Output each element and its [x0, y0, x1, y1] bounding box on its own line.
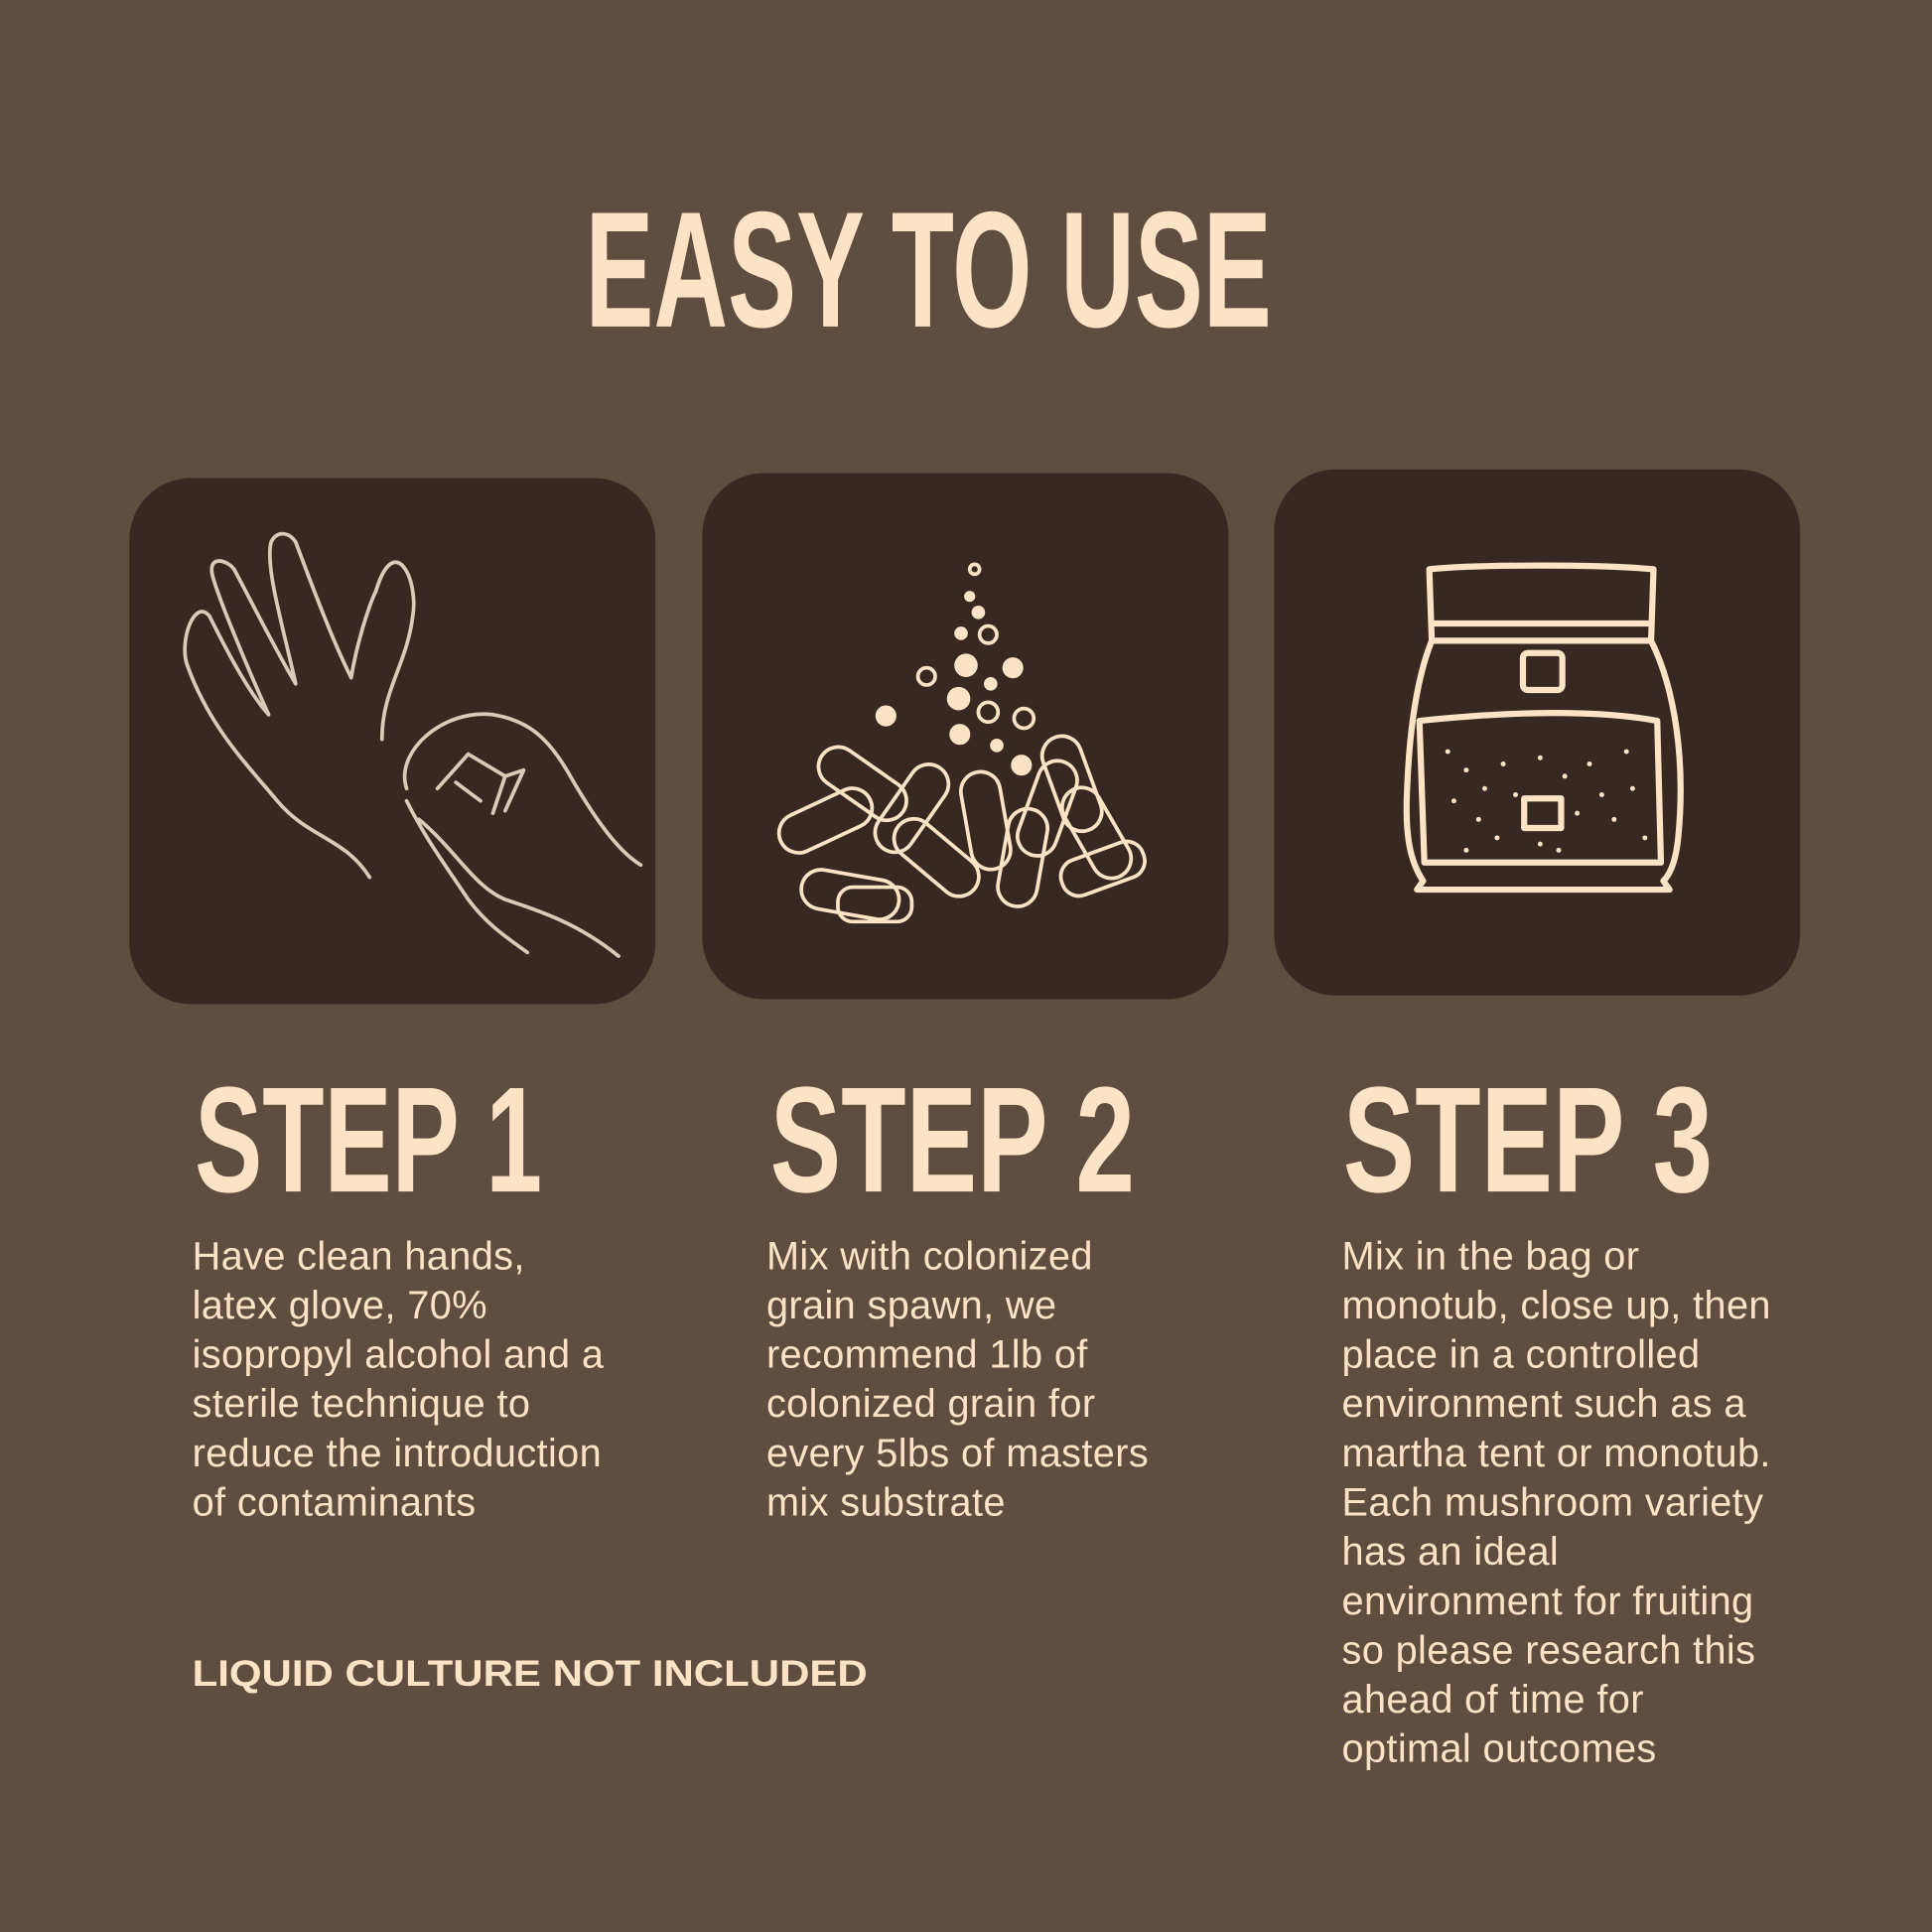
text: step 1: latex glove, 70% [193, 1284, 487, 1327]
panel: step 2 icon [702, 474, 1228, 1000]
text: step 3 [1342, 1234, 1771, 1771]
text: step 2: recommend 1lb of [766, 1333, 1088, 1377]
text: step 2: mix substrate [766, 1481, 1006, 1525]
text: step 1: reduce the introduction [193, 1432, 602, 1475]
text: step 2: every 5lbs of masters [766, 1432, 1149, 1475]
heading: step 3: STEP 3 [1343, 1056, 1713, 1224]
text: step 1: sterile technique to [193, 1382, 530, 1426]
text: step 3: so please research this [1342, 1628, 1755, 1672]
text: step 3: place in a controlled [1342, 1333, 1700, 1377]
text: step 3: Each mushroom variety [1342, 1481, 1763, 1525]
text: step 1: isopropyl alcohol and a [193, 1333, 605, 1377]
panel: step 1 icon [129, 479, 655, 1004]
text: step 3: martha tent or monotub. [1342, 1432, 1771, 1475]
text: step 3: optimal outcomes [1342, 1727, 1657, 1771]
icon: grain spawn and bubbles [772, 564, 1150, 922]
text: step 3: environment such as a [1342, 1382, 1746, 1426]
heading: step 1: STEP 1 [195, 1056, 542, 1224]
text: step 1 [193, 1234, 605, 1525]
text: step 3: monotub, close up, then [1342, 1284, 1771, 1327]
text: step 2: colonized grain for [766, 1382, 1095, 1426]
text: step 1: Have clean hands, [193, 1234, 525, 1278]
text: step 3: Mix in the bag or [1342, 1234, 1639, 1278]
heading: step 2: STEP 2 [770, 1056, 1135, 1224]
title: EASY TO USE [586, 178, 1272, 362]
text: step 3: ahead of time for [1342, 1678, 1644, 1722]
text: step 1: of contaminants [193, 1481, 476, 1525]
text: step 2: grain spawn, we [766, 1284, 1056, 1327]
icon: hands [185, 534, 640, 956]
text: step 3: environment for fruiting [1342, 1580, 1754, 1623]
note: liquid culture: LIQUID CULTURE NOT INCLUDED [193, 1652, 868, 1694]
icon: grow bag [1407, 566, 1681, 890]
text: step 2 [766, 1234, 1149, 1525]
text: step 2: Mix with colonized [766, 1234, 1093, 1278]
panel: step 3 icon [1274, 470, 1800, 996]
text: step 3: has an ideal [1342, 1530, 1559, 1574]
